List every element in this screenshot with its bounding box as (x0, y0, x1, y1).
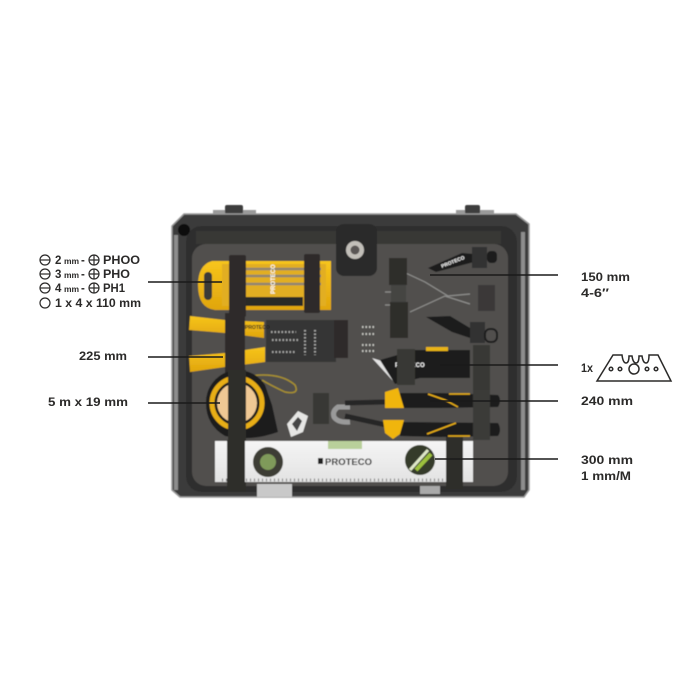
row 3: - (81, 283, 85, 295)
yellow holder (198, 261, 331, 310)
case rim (176, 232, 523, 490)
holder slot (204, 272, 212, 300)
icon: trapezoid blade (597, 355, 671, 381)
row 2: PHO (103, 269, 130, 281)
foam tray (192, 244, 508, 486)
label: 225 mm: 225 mm (79, 351, 127, 363)
blade (372, 358, 393, 381)
brand label: PROTECO (395, 363, 425, 369)
row 3: mm (64, 284, 80, 294)
strap right (478, 285, 495, 311)
row 4: 1 x 4 x 110 mm (55, 298, 141, 310)
row 3 (40, 283, 126, 295)
row 3: PH1 (103, 283, 126, 295)
upper handle accent (428, 394, 470, 407)
row 2: mm (64, 270, 80, 280)
jaw speckles (271, 330, 315, 355)
lanyard (250, 375, 296, 393)
centre vial (328, 441, 362, 449)
hinge hole (178, 224, 190, 236)
pliers 225 mm (189, 313, 376, 373)
body (206, 370, 278, 438)
row 2 (40, 269, 130, 281)
strap right (304, 254, 320, 313)
row 1 (40, 255, 140, 267)
strap right (473, 345, 490, 391)
holder handle (245, 297, 303, 306)
lower handle grip (383, 420, 404, 439)
strap handle end (472, 247, 497, 268)
head (287, 411, 308, 437)
slider (426, 347, 448, 351)
label: 150 mm: 150 mm (581, 272, 630, 284)
row 3: 4 (55, 283, 62, 295)
row 1: - (81, 255, 85, 267)
lid strap with snap (336, 224, 377, 276)
strap low (470, 322, 497, 343)
case shell (172, 214, 529, 497)
lower handle (189, 347, 265, 372)
latch: right (456, 205, 494, 215)
upper handle grip (385, 388, 404, 408)
yellow ring (212, 378, 262, 428)
latch: left (213, 205, 256, 215)
clear insert (222, 264, 326, 306)
lower strap (390, 302, 408, 338)
velcro strip (196, 231, 501, 244)
bottom clasp left (257, 484, 292, 497)
bottom clasp right (420, 486, 440, 494)
strap right (334, 320, 348, 358)
shafts (345, 402, 386, 425)
jaw (334, 407, 350, 422)
left vial (253, 447, 283, 477)
row 1: 2 (55, 255, 61, 267)
lower handle accent (427, 423, 470, 436)
tool case (172, 205, 529, 497)
strap (228, 370, 246, 492)
lower handle (426, 316, 470, 338)
upper handle (428, 253, 474, 272)
right vial (405, 445, 435, 475)
brand label: PROTECO (441, 255, 466, 270)
level body (215, 441, 473, 482)
upper strap (389, 258, 407, 285)
ruler marks (222, 478, 465, 482)
label: screwdriver sizes (40, 255, 141, 310)
strap left (229, 255, 246, 317)
brand label: PROTECO (271, 264, 277, 294)
brand label: PROTECO (325, 457, 372, 468)
screwdriver set (198, 254, 331, 317)
middle strap section (391, 285, 406, 303)
water-pump wrench (287, 388, 500, 440)
label: 1 mm/M: 1 mm/M (581, 471, 631, 483)
strap (397, 349, 415, 385)
strap (225, 313, 245, 373)
dial (217, 383, 257, 423)
tape measure (206, 370, 296, 492)
leader lines (148, 275, 558, 459)
label: 240 mm: 240 mm (581, 396, 633, 408)
row 2: 3 (55, 269, 61, 281)
jaw body (266, 320, 336, 362)
foam lining (186, 226, 517, 492)
row 1: mm (64, 256, 80, 266)
strap (473, 390, 490, 440)
lower handle (400, 422, 500, 437)
label: 300 mm: 300 mm (581, 455, 633, 467)
strap (313, 393, 329, 424)
utility knife (372, 345, 490, 391)
bit strip (362, 327, 376, 351)
body (380, 350, 470, 384)
screwdriver shafts (245, 269, 321, 284)
row 2: - (81, 269, 85, 281)
label: 1x: 1x (581, 363, 594, 375)
strap left (227, 440, 245, 490)
brand label: PROTECO (245, 325, 270, 331)
upper handle (400, 393, 500, 408)
strap right (446, 437, 463, 489)
pliers 150 mm (385, 247, 497, 343)
label: 5 m x 19 mm: 5 m x 19 mm (48, 397, 128, 409)
pliers outline (385, 268, 470, 312)
row 1: PHOO (103, 255, 140, 267)
spirit level (215, 437, 473, 497)
label: 4-6 inch: 4-6″ (581, 288, 610, 300)
upper handle (189, 316, 264, 338)
